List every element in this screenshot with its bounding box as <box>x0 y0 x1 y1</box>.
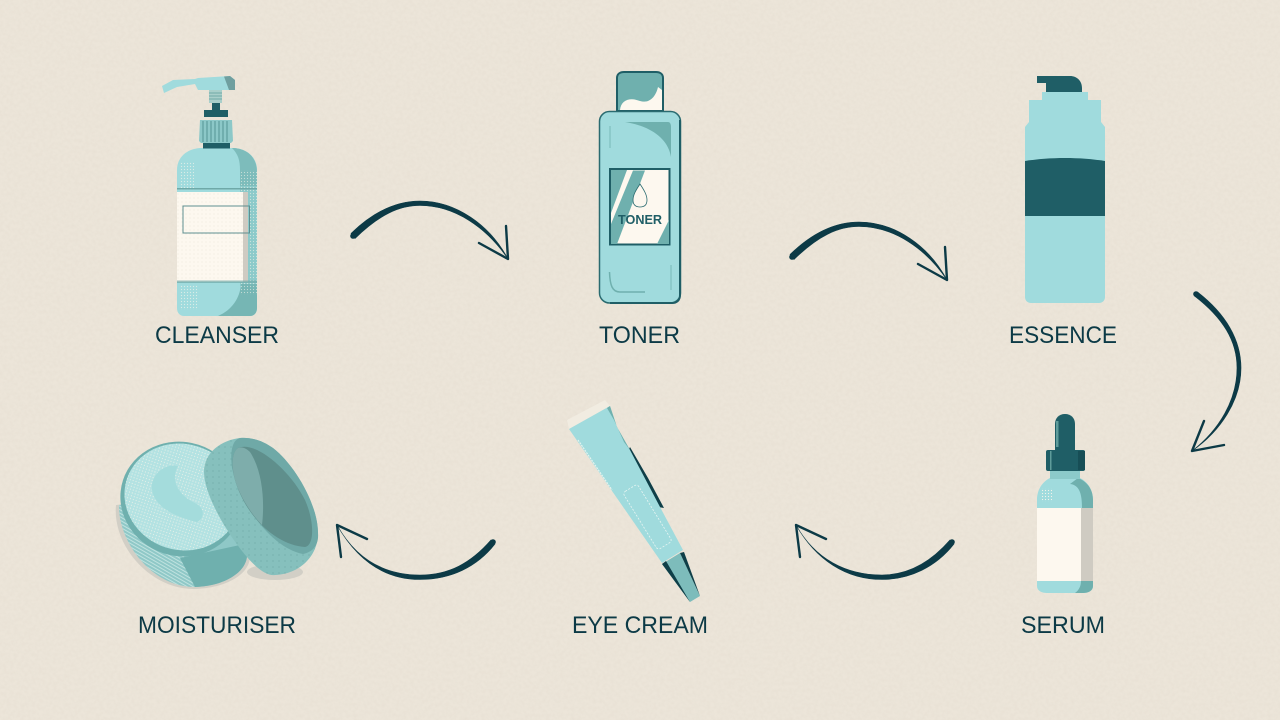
icon: eye cream tube <box>567 400 700 602</box>
arrow: essence to serum <box>1192 291 1241 451</box>
icon: essence pump bottle <box>1025 76 1105 303</box>
label: serum: SERUM <box>1021 612 1105 639</box>
icon: serum dropper bottle <box>1037 414 1093 593</box>
icon: toner bottle <box>600 72 680 303</box>
icon: toner bottle: TONER <box>618 212 663 227</box>
arrow: toner to essence <box>789 222 947 280</box>
arrow: cleanser to toner <box>350 201 508 259</box>
label: cleanser: CLEANSER <box>155 322 279 349</box>
label: essence: ESSENCE <box>1009 322 1117 349</box>
icon: cleanser pump bottle <box>162 76 257 316</box>
label: toner: TONER <box>599 322 680 349</box>
arrow: eye cream to moisturiser <box>337 525 496 580</box>
label: eye cream: EYE CREAM <box>572 612 708 639</box>
icon: moisturiser jar <box>105 426 318 589</box>
arrow: serum to eye cream <box>796 525 955 580</box>
label: moisturiser: MOISTURISER <box>138 612 296 639</box>
